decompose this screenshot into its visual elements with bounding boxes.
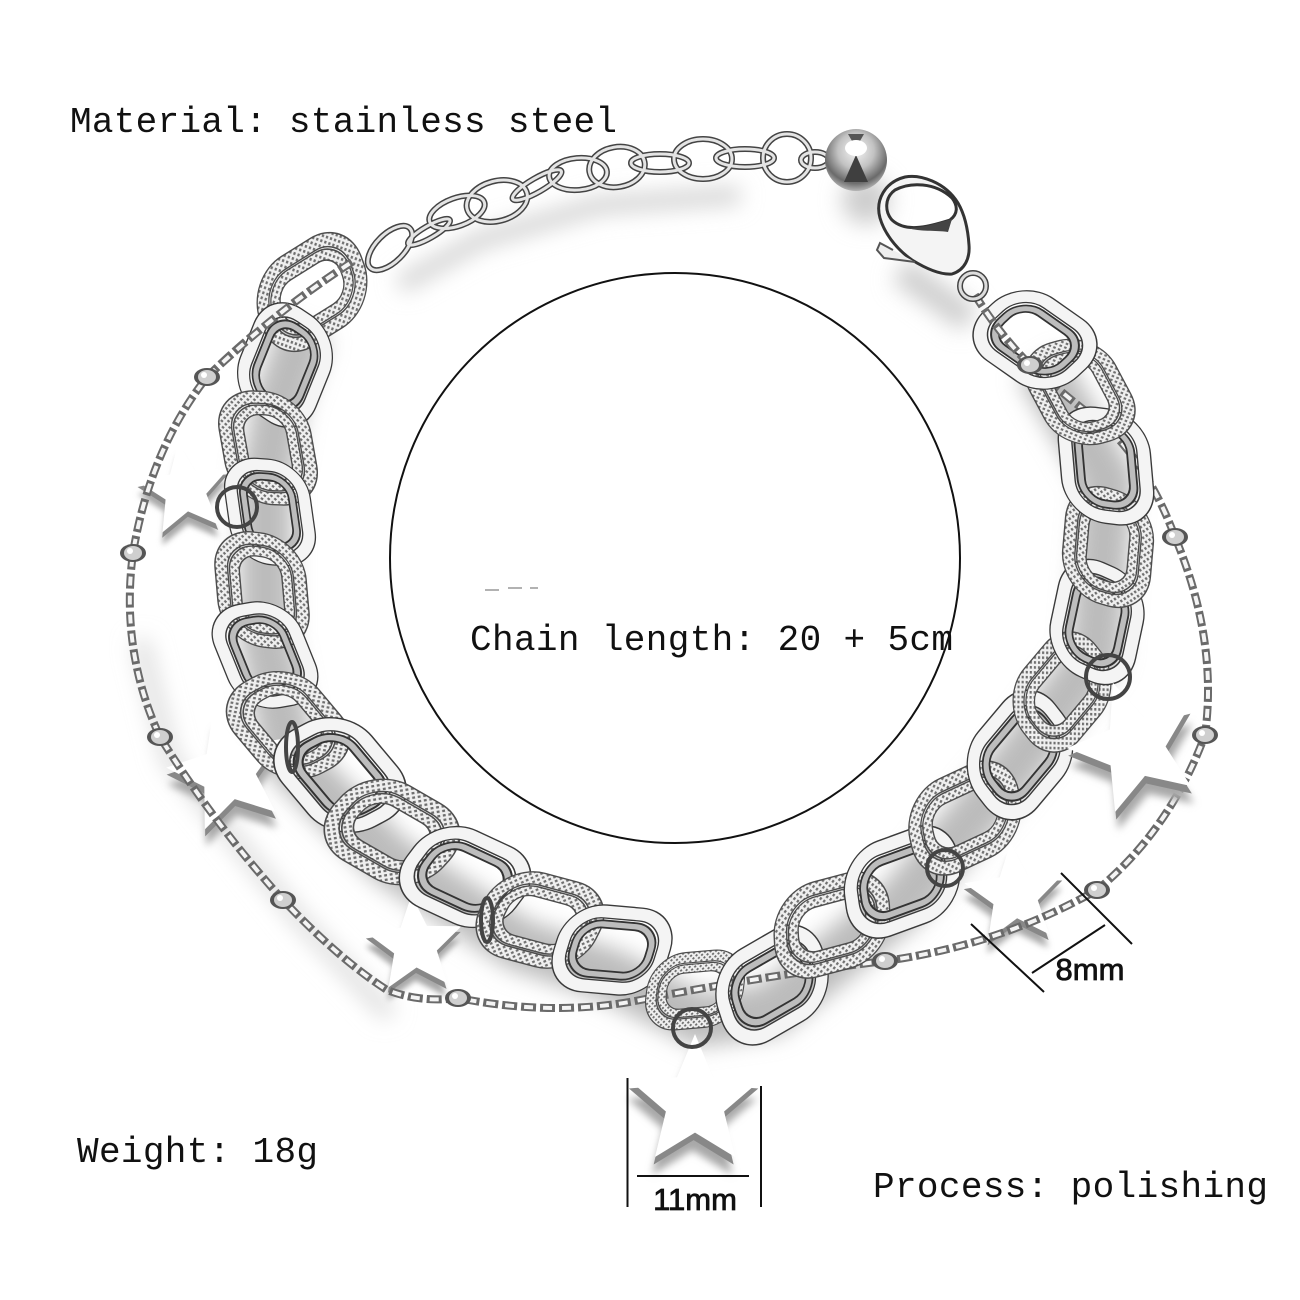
stars behind the links xyxy=(131,436,1069,1002)
star: lower left xyxy=(362,892,466,1002)
weight label: Weight: 18g xyxy=(77,1132,318,1173)
star: mid left xyxy=(153,698,301,851)
center circle xyxy=(390,273,960,843)
star: right xyxy=(1049,662,1220,838)
process label: Process: polishing xyxy=(873,1167,1268,1208)
lobster clasp xyxy=(877,176,986,299)
dimension: bead spacing 8mm xyxy=(971,873,1132,992)
stars in front of the links xyxy=(628,662,1220,1175)
extender chain xyxy=(360,134,829,278)
star: upper left xyxy=(131,436,237,547)
dimension: star width 11mm: 11mm xyxy=(653,1182,737,1217)
star: lower right xyxy=(959,839,1069,955)
end ball xyxy=(825,129,887,191)
chain length label: Chain length: 20 + 5cm xyxy=(470,620,953,661)
star: bottom center xyxy=(628,1034,760,1175)
dimension: star width 11mm xyxy=(628,1078,761,1217)
bracelet xyxy=(120,129,1220,1175)
fine satellite chain xyxy=(130,262,1208,1008)
satellite beads xyxy=(120,356,1218,1007)
material label: Material: stainless steel xyxy=(70,102,617,143)
satellite chain over the upper links xyxy=(207,262,1030,377)
double curb links xyxy=(209,225,1152,1050)
dimension: bead spacing 8mm: 8mm xyxy=(1056,952,1124,987)
jump rings xyxy=(217,487,1130,1047)
smudge xyxy=(485,588,538,590)
cast shadows xyxy=(140,176,1108,1020)
